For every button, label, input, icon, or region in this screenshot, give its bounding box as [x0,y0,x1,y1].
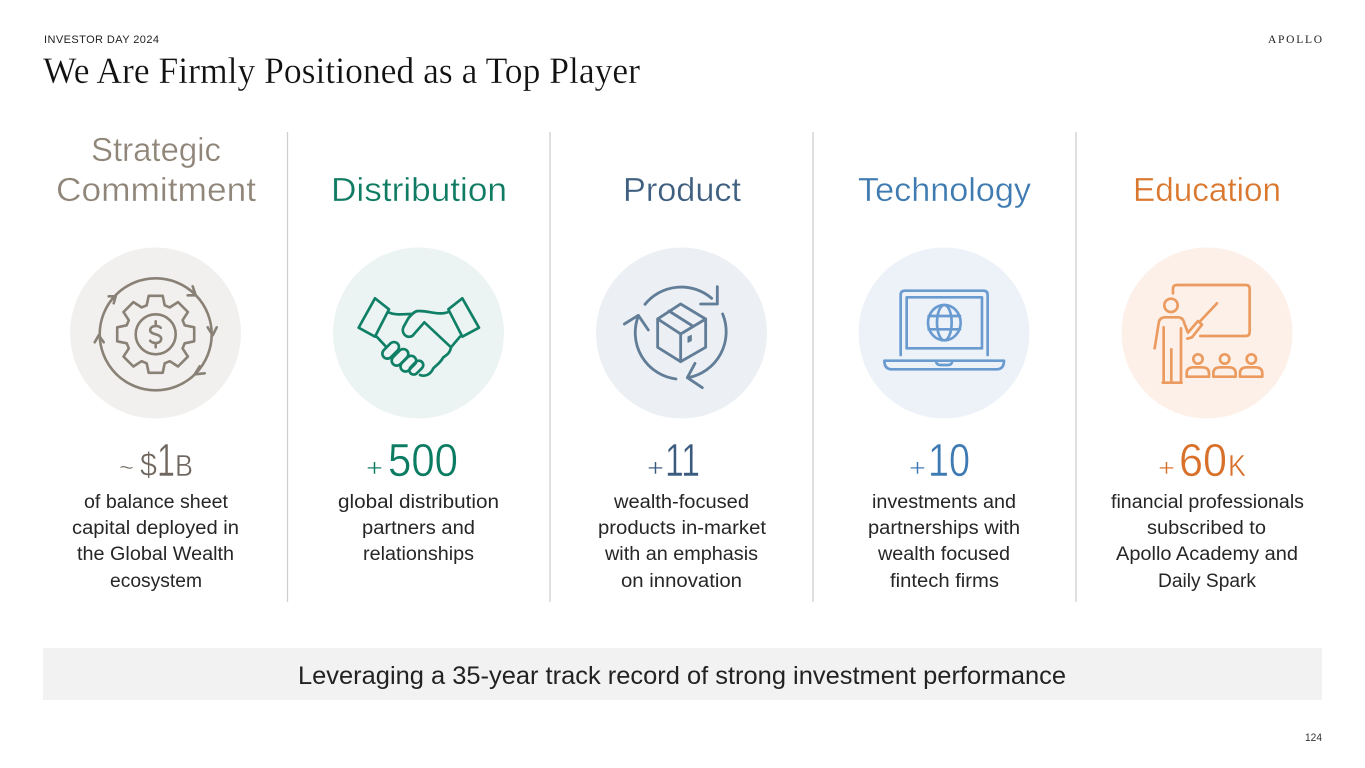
description: wealth focused [877,544,1010,565]
stat: +60K: K [1228,448,1246,483]
stat: +60K: + [1158,454,1175,482]
heading: technology: Technology [858,171,1032,208]
icon: gear with dollar and circular arrows [70,248,241,418]
icon: box with circular arrows [596,248,767,418]
description: of balance sheet [84,492,229,513]
heading: distribution: Distribution [331,171,507,208]
callout banner [43,648,1322,700]
description [1111,492,1304,592]
stat: +10: 10 [928,434,970,486]
callout banner: Leveraging a 35-year track record of strong investment performance [298,662,1066,690]
page number: 124 [1305,732,1322,744]
stat: about 1 billion: 1 [157,434,175,486]
description [868,492,1020,592]
panel: strategic commitment [56,131,256,592]
description [598,492,767,592]
panel: education [1111,171,1304,592]
description: subscribed to [1147,518,1266,539]
stat: about 1 billion: $ [140,446,157,483]
stat: +500: + [366,454,383,482]
description: fintech firms [890,571,999,592]
title: We Are Firmly Positioned as a Top Player [43,51,640,92]
stat: +11: 11 [665,434,700,486]
logo: Apollo: APOLLO [1268,34,1322,46]
description: products in-market [598,518,767,539]
description: with an emphasis [604,544,758,565]
stat: +11: + [647,454,664,482]
panel: technology [858,171,1032,592]
heading: strategic commitment [56,131,256,208]
icon: instructor at board with audience [1122,248,1292,418]
description: investments and [872,492,1016,513]
header label: INVESTOR DAY 2024 [44,34,159,46]
icon: handshake [333,248,504,418]
stat: about 1 billion: B [175,448,193,483]
description: partners and [362,518,475,539]
heading: product: Product [623,171,741,208]
description: wealth-focused [613,492,749,513]
description: on innovation [621,571,742,592]
description: financial professionals [1111,492,1304,513]
heading: education: Education [1133,171,1281,208]
description [72,492,239,592]
description: relationships [363,544,474,565]
stat: +500: 500 [388,434,458,486]
icon: laptop with globe [858,248,1030,418]
stat: about 1 billion [119,434,193,486]
heading: strategic commitment: Commitment [56,171,256,208]
stat: +60K [1158,434,1246,486]
heading: strategic commitment: Strategic [91,131,221,168]
description: capital deployed in [72,518,239,539]
description: the Global Wealth [77,544,234,565]
stat: +11 [647,434,700,486]
description: partnerships with [868,518,1020,539]
description: Apollo Academy and [1116,544,1298,565]
description: Daily Spark [1158,571,1256,592]
description [338,492,499,565]
panel: product [596,171,767,592]
stat: +10: + [909,454,926,482]
stat: +60K: 60 [1179,434,1227,486]
stat: about 1 billion: ~ [119,454,134,482]
panel: distribution [331,171,507,565]
description: global distribution [338,492,499,513]
stat: +10 [909,434,970,486]
description: ecosystem [110,571,202,592]
